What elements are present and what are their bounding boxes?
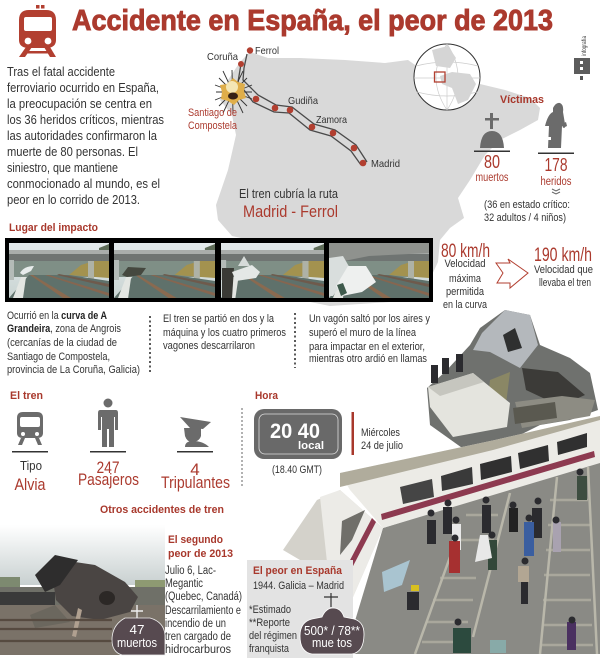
- map labels: Gudiña: [288, 95, 318, 107]
- route caption: El tren cubría la ruta: [239, 187, 338, 201]
- intro text: siniestro, que mantiene: [7, 161, 118, 175]
- intro text: la preocupación se centra en: [7, 97, 152, 111]
- text: Lac-Megantic: tren cargado de: [165, 631, 231, 643]
- intro text: los 36 heridos críticos, mientras: [7, 113, 164, 127]
- caption 1: provincia de La Coruña, Galicia): [7, 364, 140, 376]
- icon: globe locator: [414, 44, 480, 110]
- speed 80: [441, 241, 490, 311]
- text: Lac-Megantic: hidrocarburos: [165, 644, 231, 656]
- panel: worst in Spain: franquista: [249, 643, 290, 655]
- map labels: Coruña: [207, 51, 238, 63]
- text: Lac-Megantic: incendio de un: [165, 618, 226, 630]
- text: Lac-Megantic: Descarrilamiento e: [165, 605, 241, 617]
- stat: 247 Pasajeros: Pasajeros: [78, 470, 139, 489]
- main carriage: [340, 416, 600, 528]
- text: Lac-Megantic: Megantic: [165, 578, 203, 590]
- note: critical condition: (36 en estado crítico:: [484, 199, 570, 211]
- caption 2: máquina y los cuatro primeros: [163, 327, 286, 339]
- panel: worst in Spain: del régimen: [249, 630, 297, 642]
- caption 3: Un vagón saltó por los aires y: [309, 313, 430, 325]
- route caption: Madrid - Ferrol: [243, 202, 338, 221]
- clock badge: local: [298, 440, 324, 452]
- caption 1: (cercanías de la ciudad de: [7, 337, 117, 349]
- badge: 47 muertos: [112, 605, 165, 655]
- stat: tipo Alvia: Alvia: [14, 475, 46, 494]
- caption 3: mientras otro ardió en llamas: [309, 353, 427, 365]
- intro text: conmocionado al mundo, es el: [7, 177, 160, 191]
- stat: 4 Tripulantes: 4: [190, 460, 200, 479]
- map labels: Santiago de: [188, 107, 237, 119]
- panel: worst in Spain: **Reporte: [249, 617, 290, 629]
- caption 3: [309, 313, 430, 365]
- stat: 80 muertos: 80: [484, 152, 500, 172]
- map: Spain silhouette: [216, 52, 540, 306]
- heading: El tren: El tren: [10, 390, 43, 402]
- route stops: [238, 47, 366, 166]
- logo: EFE agency: [574, 35, 590, 80]
- panel: worst in Spain: El peor en España: [253, 565, 343, 577]
- clock badge: 20 40: [270, 420, 320, 443]
- text: Lac-Megantic: [165, 565, 242, 656]
- heading: Hora: Hora: [255, 390, 279, 402]
- heading: Lugar del impacto: Lugar del impacto: [9, 222, 98, 234]
- map labels: Madrid: [371, 158, 400, 170]
- photo strip: impact sequence: [5, 238, 433, 302]
- title: Accidente en España, el peor de 2013: [72, 5, 553, 37]
- icon: passenger: [90, 398, 126, 452]
- speed 80: 80 km/h: [441, 241, 490, 262]
- caption 1: Santiago de Compostela,: [7, 351, 110, 363]
- intro text: las autoridades confirmaron la: [7, 129, 157, 143]
- intro text: muerte de 80 personas. El: [7, 145, 138, 159]
- map labels: Compostela: [188, 120, 238, 132]
- caption 2: El tren se partió en dos y la: [163, 313, 275, 325]
- map labels: [188, 45, 400, 170]
- icon: red train: [19, 5, 56, 57]
- badge: 500 / 78 muertos: [300, 608, 364, 654]
- arrow: [496, 259, 528, 288]
- photo: Lac-Megantic wreck: [0, 525, 165, 655]
- badge: 47 muertos: muertos: [117, 635, 157, 650]
- caption 2: vagones descarrilaron: [163, 340, 255, 352]
- workers on wreck: [431, 354, 463, 383]
- route line Ferrol to Madrid: [238, 54, 367, 165]
- caption 3: para impactar en el exterior,: [309, 341, 425, 353]
- caption 1: Grandeira, zona de Angrois: [7, 323, 121, 335]
- heading: El segundo peor: peor de 2013: [168, 548, 233, 560]
- heading: El segundo peor: El segundo: [168, 534, 223, 546]
- left carriage: [283, 490, 383, 597]
- map labels: Ferrol: [255, 45, 279, 57]
- caption 1: [7, 310, 140, 376]
- stat: 4 Tripulantes: Tripulantes: [161, 473, 230, 492]
- note: critical condition: 32 adultos / 4 niños): [484, 212, 566, 224]
- stat: 247 Pasajeros: 247: [96, 458, 120, 477]
- rescue workers: [407, 468, 587, 653]
- speed 80: permitida: [446, 286, 485, 298]
- speed 80: en la curva: [443, 299, 488, 311]
- heading: Otros accidentes de tren: Otros accidentes de tren: [100, 504, 224, 516]
- icon: injured person: [538, 103, 574, 154]
- icon: explosion: [215, 70, 252, 113]
- heading: El segundo peor: [168, 534, 233, 560]
- panel: worst in Spain: *Estimado: [249, 604, 291, 616]
- stat: 178 heridos: heridos: [540, 176, 572, 188]
- icon: grave: [474, 113, 510, 152]
- stat: 178 heridos: [540, 155, 572, 194]
- panel: worst in Spain: 1944. Galicia – Madrid: [253, 580, 344, 592]
- text: Lac-Megantic: (Quebec, Canadá): [165, 591, 242, 603]
- map labels: Zamora: [316, 114, 347, 126]
- caption 3: superó el muro de la línea: [309, 327, 417, 339]
- white carriage in wreck: [428, 373, 510, 437]
- note: critical condition: [484, 199, 570, 224]
- stat: 178 heridos: 178: [544, 155, 568, 175]
- clock badge: [254, 409, 342, 459]
- intro text: peor en lo corrido de 2013.: [7, 193, 140, 207]
- stat: 247 Pasajeros: [78, 458, 139, 489]
- speed 80: Velocidad: [444, 258, 486, 270]
- icon: crew member: [177, 417, 213, 452]
- stat: tipo Alvia: Tipo: [20, 458, 42, 473]
- panel: worst in Spain: [247, 560, 353, 658]
- icon: train gray: [12, 412, 48, 452]
- photo: crash site: [283, 310, 600, 654]
- date: Miércoles: [361, 427, 400, 439]
- intro text: ferroviario ocurrido en España,: [7, 81, 159, 95]
- GMT time: (18.40 GMT): [272, 464, 322, 476]
- intro text: [7, 65, 164, 207]
- logo: EFE agency: infografía: [582, 35, 588, 56]
- intro text: Tras el fatal accidente: [7, 65, 115, 79]
- text: Lac-Megantic: Julio 6, Lac-: [165, 565, 216, 577]
- badge: 47 muertos: 47: [130, 622, 144, 637]
- badge: 500 / 78 muertos: 500* / 78**: [304, 623, 360, 638]
- stat: tipo Alvia: [14, 458, 46, 494]
- stat: 80 muertos: muertos: [476, 172, 509, 184]
- stat: 80 muertos: [476, 152, 509, 184]
- route caption: [239, 187, 338, 221]
- caption 2: [163, 313, 286, 352]
- badge: 500 / 78 muertos: mue tos: [312, 635, 352, 650]
- stat: 4 Tripulantes: [161, 460, 230, 492]
- date: [352, 412, 403, 455]
- wreck pile: [427, 310, 598, 450]
- speed 190: [534, 245, 593, 289]
- heading: Víctimas: Víctimas: [500, 94, 544, 106]
- date: 24 de julio: [361, 440, 403, 452]
- caption 1: Ocurrió en la curva de A: [7, 310, 107, 322]
- speed 80: máxima: [449, 273, 482, 285]
